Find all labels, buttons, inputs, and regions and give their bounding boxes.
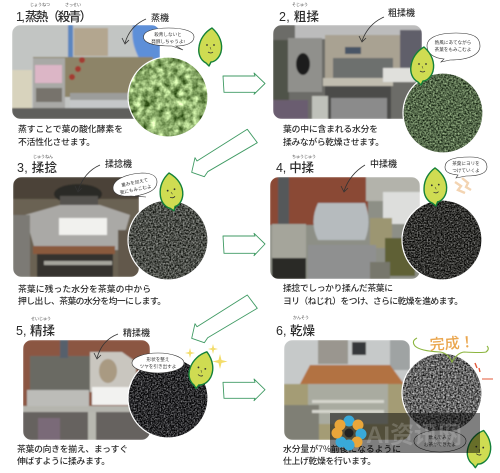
step 5 description: 伸ばすように揉みます。 bbox=[17, 455, 110, 466]
step 2 photo: rough rolling machine bbox=[273, 25, 422, 119]
step 4 photo: medium rolling machine bbox=[270, 177, 420, 279]
step 6 title bbox=[276, 314, 315, 338]
step 4 title: 4, 中揉 bbox=[276, 160, 314, 175]
step 5 mascot leaf bbox=[186, 349, 216, 391]
step 6 description bbox=[283, 443, 401, 466]
step 3 description bbox=[18, 283, 166, 306]
step 2 machine label: 粗揉機 bbox=[388, 7, 415, 18]
step 3 description: 茶葉に残った水分を茶葉の中から bbox=[18, 283, 151, 294]
step 1 machine label bbox=[122, 12, 169, 44]
step 1 title bbox=[16, 1, 92, 24]
step 3 title bbox=[17, 153, 57, 175]
step 5 speech bubble bbox=[132, 353, 184, 373]
step 4 title: ちゅうじゅう bbox=[292, 153, 316, 159]
step 4 machine label: 中揉機 bbox=[370, 158, 397, 169]
step 1 machine label: 蒸機 bbox=[151, 12, 169, 23]
step 5 sparkles bbox=[185, 344, 228, 369]
step 5 description: 茶葉の向きを揃え、まっすぐ bbox=[17, 443, 128, 454]
arrow: step 2 to 3 bbox=[192, 129, 257, 177]
step 6 description: 仕上げ乾燥を行います。 bbox=[283, 455, 376, 466]
step 1 photo: steaming machine bbox=[12, 25, 160, 119]
step 3 title: 3, 揉捻 bbox=[17, 160, 57, 175]
step 6 tea leaf circle bbox=[402, 353, 482, 433]
step 5 speech bubble: 形状を整え bbox=[147, 356, 170, 363]
step 1 tea leaf circle bbox=[128, 57, 208, 137]
step 4 description: 揉捻でしっかり揉んだ茶葉に bbox=[283, 282, 393, 293]
step 3 mascot leaf bbox=[156, 171, 186, 213]
step 2 speech bubble bbox=[427, 33, 480, 62]
step 1 speech bubble bbox=[144, 28, 194, 50]
step 2 description bbox=[283, 123, 384, 147]
step 3 tea leaf circle bbox=[128, 200, 208, 280]
step 4 tea leaf circle bbox=[402, 200, 482, 280]
step 5 title: せいじゅう bbox=[31, 315, 51, 321]
step 2 description: 葉の中に含まれる水分を bbox=[283, 123, 378, 134]
step 4 title bbox=[276, 153, 316, 175]
arrow: step 1 to 2 bbox=[223, 73, 265, 94]
step 4 speech bubble: 茶葉にヨリを bbox=[452, 160, 480, 167]
step 2 title: そじゅう bbox=[292, 1, 308, 7]
step 1 title: 1, 蒸熱（殺青） bbox=[16, 10, 92, 24]
step 4 mascot leaf bbox=[422, 167, 449, 207]
step 3 speech bubble bbox=[113, 173, 157, 197]
step 6 speech bubble: お茶ができたよ bbox=[424, 441, 456, 448]
arrow: step 3 to 4 bbox=[223, 233, 265, 256]
step 1 speech bubble: 殺青しないと bbox=[154, 31, 182, 38]
step 6 speech bubble bbox=[414, 430, 466, 452]
step 6 photo: drying machine bbox=[284, 340, 410, 440]
panel: step 5 final rolling bbox=[16, 315, 228, 466]
step 3 speech bubble: 重みを加えて bbox=[121, 176, 149, 189]
step 4 machine label bbox=[341, 158, 397, 192]
step 5 machine label bbox=[94, 327, 150, 359]
step 1 speech bubble: 発酵しちゃうよ! bbox=[151, 38, 185, 45]
step 6 completion banner: 完成！ bbox=[429, 334, 475, 354]
step 3 machine label bbox=[75, 158, 132, 192]
step 2 speech bubble: 茶葉をもみこむよ bbox=[435, 46, 471, 53]
step 3 photo: rolling machine bbox=[13, 177, 139, 277]
panel: step 6 drying bbox=[276, 314, 493, 469]
step 5 photo: final rolling machine bbox=[23, 340, 150, 440]
step 2 title bbox=[279, 1, 319, 24]
step 5 tea leaf circle bbox=[128, 358, 208, 438]
step 3 description: 押し出し、茶葉の水分を均一にします。 bbox=[18, 295, 166, 306]
step 4 description bbox=[283, 282, 463, 306]
step 5 description bbox=[17, 443, 128, 466]
step 2 description: 揉みながら乾燥させます。 bbox=[283, 136, 384, 147]
step 5 speech bubble: ツヤを引き出すよ bbox=[140, 363, 176, 370]
step 4 speech bubble bbox=[445, 157, 487, 178]
step 5 title: 5, 精揉 bbox=[16, 323, 55, 338]
step 5 title bbox=[16, 315, 55, 338]
step 4 description: ヨリ（ねじれ）をつけ、さらに乾燥を進めます。 bbox=[283, 295, 463, 306]
step 4 speech bubble: つけていくよ bbox=[452, 168, 480, 174]
panel: step 3 rolling bbox=[13, 153, 208, 306]
step 2 title: 2, 粗揉 bbox=[279, 9, 319, 24]
step 3 speech bubble: 更にもみこむよ bbox=[119, 184, 152, 196]
step 2 machine label bbox=[359, 7, 415, 42]
step 6 completion banner bbox=[413, 334, 493, 379]
step 3 machine label: 揉捻機 bbox=[105, 158, 132, 169]
step 4 motion marks bbox=[455, 178, 471, 193]
step 5 machine label: 精揉機 bbox=[123, 327, 150, 338]
step 1 title: じょうねつ bbox=[30, 1, 50, 7]
step 6 speech bubble: 飲んでみて bbox=[429, 434, 452, 441]
step 1 description: 蒸すことで葉の酸化酵素を bbox=[18, 123, 123, 134]
step 2 mascot leaf bbox=[411, 47, 434, 85]
step 2 tea leaf circle bbox=[403, 73, 483, 153]
watermark band bbox=[330, 413, 480, 453]
step 1 title: さっせい bbox=[65, 1, 81, 7]
step 1 description: 不活性化させます。 bbox=[18, 136, 95, 147]
step 6 title: 6, 乾燥 bbox=[276, 323, 315, 338]
panel: step 1 steaming bbox=[12, 1, 222, 147]
panel: step 4 medium rolling bbox=[270, 153, 487, 306]
step 3 title: じゅうねん bbox=[33, 153, 53, 159]
step 6 title: かんそう bbox=[293, 314, 309, 320]
arrow: step 5 to 6 bbox=[223, 379, 265, 401]
step 6 mascot leaf bbox=[465, 429, 493, 469]
panel: step 2 rough rolling bbox=[273, 1, 483, 153]
watermark logo bbox=[332, 416, 366, 450]
step 1 description bbox=[18, 123, 123, 147]
step 6 description: 水分量が7%前後になるように bbox=[283, 443, 401, 454]
step 2 speech bubble: 熱風にあてながら bbox=[435, 39, 471, 46]
watermark band: AI资讯网 bbox=[366, 422, 462, 449]
step 1 mascot leaf bbox=[199, 28, 222, 66]
arrow: step 4 to 5 bbox=[192, 295, 257, 343]
